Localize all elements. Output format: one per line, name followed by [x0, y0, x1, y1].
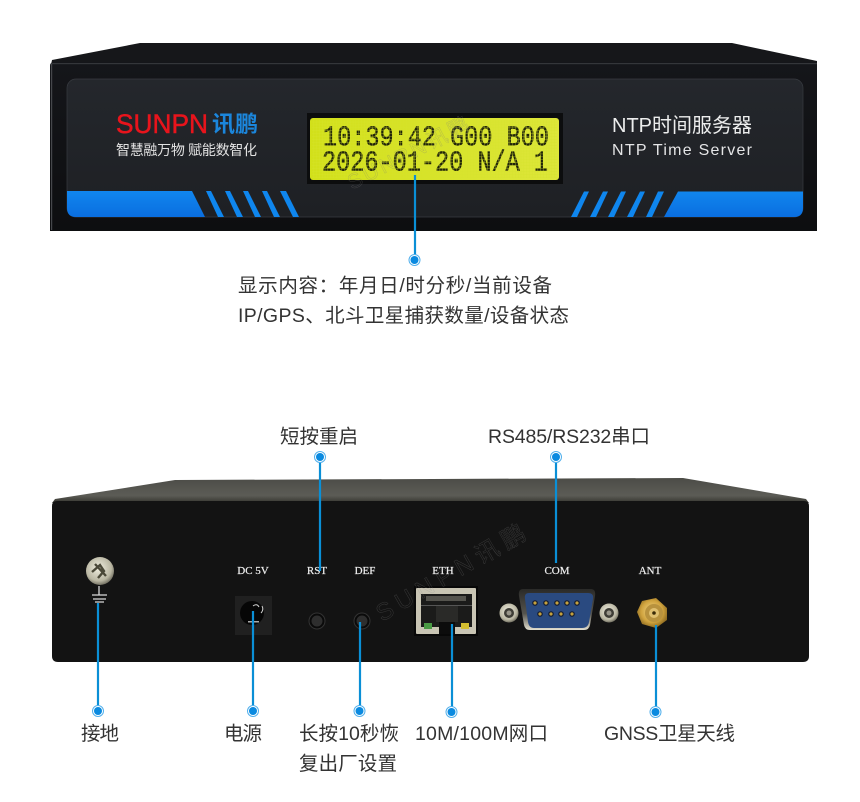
rear top surface [52, 478, 809, 503]
LCD display: 2026-01-20 N/A 1 [322, 146, 548, 180]
label: factory reset: 复出厂设置 [299, 753, 397, 775]
COM port [500, 589, 618, 630]
product name [612, 114, 753, 159]
label: factory reset [299, 723, 399, 775]
silkscreen labels [237, 565, 662, 577]
front device [50, 43, 817, 231]
display description [238, 275, 569, 327]
silkscreen labels: DEF [355, 565, 375, 577]
ANT connector [637, 598, 667, 628]
display description: IP/GPS、北斗卫星捕获数量/设备状态 [238, 305, 569, 327]
rear device [52, 478, 809, 662]
pointer: antenna [650, 625, 661, 718]
pointer: ground [92, 603, 104, 716]
label: ground: 接地 [81, 723, 119, 745]
logo: 智慧融万物 赋能数智化 [116, 142, 257, 158]
DC jack [235, 596, 272, 635]
DEF button [354, 613, 370, 629]
silkscreen labels: ETH [432, 565, 454, 577]
watermark: SUNPN讯鹏 [344, 112, 476, 194]
LCD display: 10:39:42 G00 B00 [323, 122, 549, 154]
label: reset: 短按重启 [280, 426, 358, 448]
front chassis [50, 62, 817, 231]
RST button [309, 613, 325, 629]
label: serial: RS485/RS232串口 [488, 426, 650, 448]
label: antenna: GNSS卫星天线 [604, 723, 735, 745]
pointer: default [354, 622, 365, 716]
left stripes [206, 191, 299, 217]
pointer: reset [314, 452, 326, 571]
logo: 讯鹏 [212, 112, 258, 137]
label: power: 电源 [224, 723, 262, 745]
front top surface [50, 43, 817, 70]
LCD display [307, 113, 563, 184]
right stripes [571, 192, 664, 217]
ETH port [414, 586, 478, 636]
logo [116, 109, 258, 158]
product name: NTP时间服务器 [612, 114, 752, 137]
right blue bar [664, 192, 803, 217]
pointer: LCD [409, 175, 420, 266]
front panel [67, 79, 803, 217]
pointer: power [248, 611, 258, 716]
watermark: SUNPN讯鹏 [372, 517, 536, 627]
silkscreen labels: COM [544, 565, 570, 577]
label: ethernet: 10M/100M网口 [415, 723, 548, 745]
ground screw [86, 557, 114, 602]
silkscreen labels: ANT [639, 565, 662, 577]
pointer: ethernet [446, 624, 457, 718]
left blue bar [67, 191, 205, 217]
silkscreen labels: DC 5V [237, 565, 269, 577]
display description: 显示内容：年月日/时分秒/当前设备 [238, 275, 552, 297]
pointer: serial [550, 452, 562, 563]
rear chassis [52, 501, 809, 662]
logo: SUNPN [116, 109, 208, 139]
silkscreen labels: RST [307, 565, 327, 577]
label: factory reset: 长按10秒恢 [299, 723, 399, 745]
product name: NTP Time Server [612, 142, 753, 159]
